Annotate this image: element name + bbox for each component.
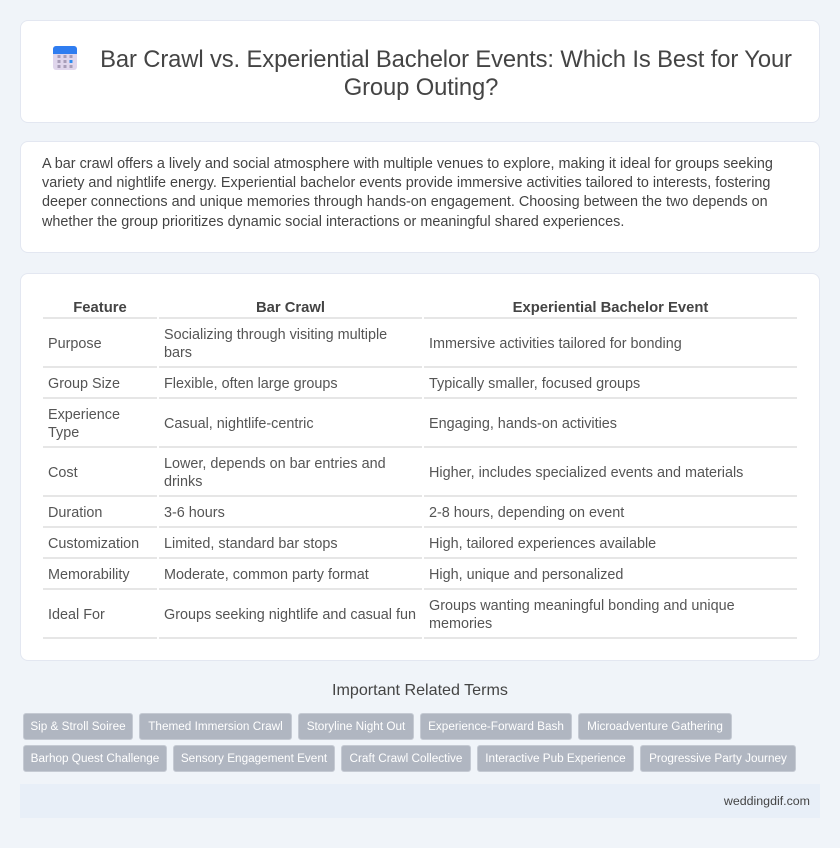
intro card	[20, 141, 820, 253]
row: Purpose: Immersive activities tailored for bonding	[429, 336, 682, 352]
row: Cost: Higher, includes specialized events and materials	[429, 465, 743, 481]
title: Bar Crawl vs. Experiential Bachelor Events: Which Is Best for Your	[100, 46, 792, 73]
intro text: whether the group prioritizes dynamic social interactions or meaningful shared experiences.	[42, 214, 624, 230]
tag: Themed Immersion Crawl	[148, 720, 283, 733]
footer source text: weddingdif.com	[724, 794, 810, 808]
tag	[578, 713, 732, 740]
tag	[23, 713, 133, 740]
row: Ideal For: Groups seeking nightlife and casual fun	[164, 607, 416, 623]
table header: Feature	[73, 300, 127, 316]
related terms heading: Important Related Terms	[332, 681, 508, 699]
icon: calendar	[53, 46, 77, 70]
row: Cost: drinks	[164, 474, 202, 490]
row: Experience Type	[43, 407, 797, 448]
row: Ideal For: Ideal For	[48, 607, 105, 623]
tag	[298, 713, 414, 740]
row: Memorability: High, unique and personalized	[429, 567, 623, 583]
title card	[20, 20, 820, 123]
row: Duration: Duration	[48, 505, 102, 521]
intro text	[42, 156, 773, 230]
row: Experience Type: Type	[48, 425, 79, 441]
row: Ideal For: memories	[429, 616, 492, 632]
tag: Storyline Night Out	[307, 720, 405, 733]
row: Group Size	[43, 376, 797, 399]
row: Ideal For: Groups wanting meaningful bonding and unique	[429, 598, 735, 614]
tag	[420, 713, 572, 740]
tag	[477, 745, 634, 772]
row: Experience Type: Experience	[48, 407, 120, 423]
intro text: variety and nightlife energy. Experiential bachelor events provide immersive activities tailored to interests, fostering	[42, 175, 770, 191]
row: Purpose: bars	[164, 345, 192, 361]
row: Customization: Limited, standard bar stops	[164, 536, 338, 552]
tag: Sensory Engagement Event	[181, 752, 327, 765]
table header	[43, 300, 797, 319]
row: Group Size: Typically smaller, focused groups	[429, 376, 640, 392]
row: Memorability: Memorability	[48, 567, 130, 583]
tag	[23, 745, 167, 772]
related term tags	[23, 713, 796, 772]
tag	[173, 745, 335, 772]
row: Cost	[43, 456, 797, 497]
row: Cost: Cost	[48, 465, 78, 481]
tag	[341, 745, 471, 772]
table header: Bar Crawl	[256, 300, 325, 316]
footer	[20, 784, 820, 818]
tag: Interactive Pub Experience	[485, 752, 626, 765]
row: Group Size: Group Size	[48, 376, 120, 392]
table card	[20, 273, 820, 661]
title	[100, 46, 792, 101]
row: Experience Type: Engaging, hands-on activities	[429, 416, 617, 432]
row: Duration	[43, 505, 797, 528]
tag	[139, 713, 292, 740]
tag: Barhop Quest Challenge	[31, 752, 159, 765]
row: Purpose: Purpose	[48, 336, 102, 352]
tag: Experience-Forward Bash	[428, 720, 564, 733]
intro text: A bar crawl offers a lively and social atmosphere with multiple venues to explore, making it ideal for groups seeking	[42, 156, 773, 172]
table header: Experiential Bachelor Event	[513, 300, 708, 316]
row: Memorability	[43, 567, 797, 590]
row: Group Size: Flexible, often large groups	[164, 376, 338, 392]
row: Experience Type: Casual, nightlife-centric	[164, 416, 314, 432]
row: Duration: 3-6 hours	[164, 505, 225, 521]
row: Customization	[43, 536, 797, 559]
row: Customization: High, tailored experiences available	[429, 536, 656, 552]
tag: Craft Crawl Collective	[350, 752, 462, 765]
row: Purpose	[43, 327, 797, 368]
row: Purpose: Socializing through visiting multiple	[164, 327, 387, 343]
tag	[640, 745, 796, 772]
tag: Progressive Party Journey	[649, 752, 787, 765]
row: Duration: 2-8 hours, depending on event	[429, 505, 624, 521]
row: Cost: Lower, depends on bar entries and	[164, 456, 386, 472]
row: Memorability: Moderate, common party format	[164, 567, 369, 583]
title: Group Outing?	[344, 74, 498, 101]
tag: Sip & Stroll Soiree	[30, 720, 126, 733]
row: Ideal For	[43, 598, 797, 639]
tag: Microadventure Gathering	[587, 720, 723, 733]
intro text: deeper connections and unique memories through hands-on engagement. Choosing between the two depends on	[42, 194, 768, 210]
row: Customization: Customization	[48, 536, 139, 552]
